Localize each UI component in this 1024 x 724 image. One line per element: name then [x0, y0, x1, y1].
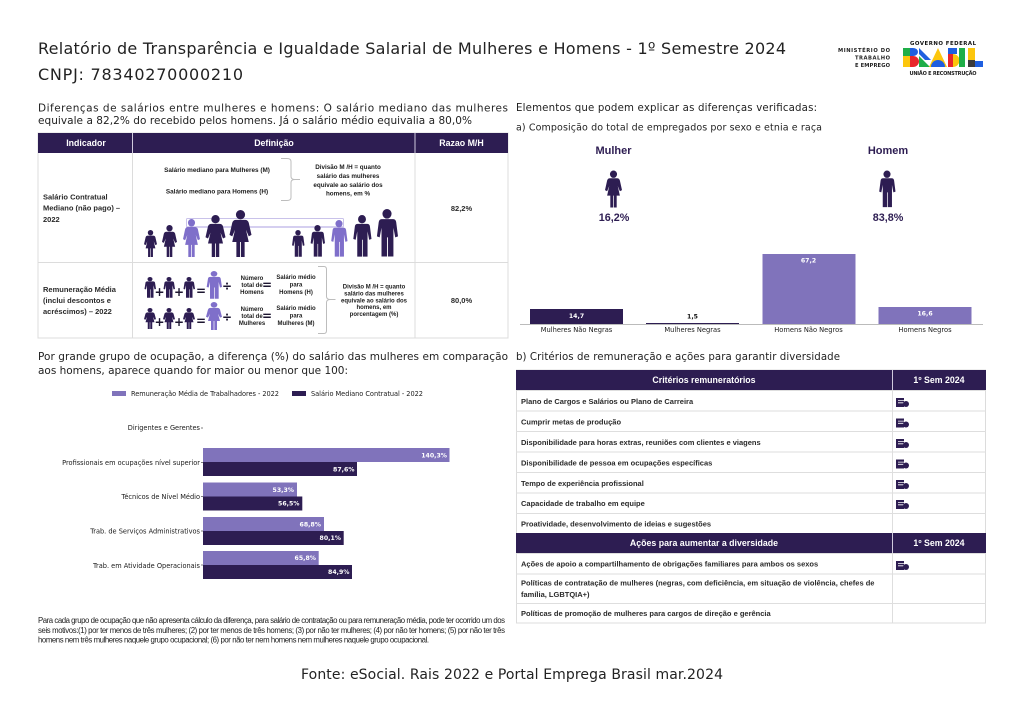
rows: remuneration criteria: Capacidade de trabalho em equipe [521, 499, 645, 508]
rows: diversity actions [521, 560, 874, 618]
header: diversity actions: 1º Sem 2024 [913, 538, 965, 548]
rows: remuneration criteria: Disponibilidade de pessoa em ocupações específicas [521, 458, 712, 468]
table header: Indicador [66, 138, 106, 148]
government logo: UNIÃO E RECONSTRUÇÃO [910, 70, 976, 77]
definition: division explanation: Divisão M /H = quanto [315, 164, 381, 171]
icon: yes marker [896, 561, 909, 570]
rows: remuneration criteria: Tempo de experiência profissional [521, 479, 644, 488]
bar values: 80,1% [320, 535, 341, 542]
stat: men: Homem [868, 145, 908, 157]
heading: explaining elements: Elementos que podem explicar as diferenças verificadas: [516, 103, 817, 114]
bracket [318, 266, 336, 334]
equation: women: Mulheres [239, 321, 266, 327]
heading: criteria: b) Critérios de remuneração e ações para garantir diversidade [516, 351, 840, 363]
intro text: salary differences: equivale a 82,2% do recebido pelos homens. Já o salário médio equivalia a 80,0% [38, 115, 472, 127]
icons: yes markers [896, 398, 909, 509]
title: CNPJ: 78340270000210 [38, 65, 243, 84]
row label: contractual salary [43, 192, 120, 224]
equation: men: = [262, 278, 272, 292]
definition: average division explanation: equivale ao salário dos [341, 298, 408, 304]
rows: diversity actions: Ações de apoio a compartilhamento de obrigações familiares para ambos os sexos [521, 560, 818, 568]
row label: average remuneration: (inclui descontos e [43, 296, 111, 305]
equation: men: + [174, 285, 184, 299]
header: remuneration criteria [516, 370, 986, 390]
rows: remuneration criteria: Cumprir metas de produção [521, 418, 621, 426]
rows: diversity actions: família, LGBTQIA+) [521, 590, 590, 599]
axis labels: Trab. de Serviços Administrativos [89, 528, 201, 536]
row label: contractual salary: 2022 [43, 215, 60, 224]
definition: average division explanation: salário das mulheres [344, 292, 405, 298]
row label: average remuneration: Remuneração Média [43, 285, 117, 294]
equation: women: total de [241, 314, 263, 320]
bars: median salary [203, 462, 357, 579]
median connector [186, 218, 344, 228]
definition: median salary labels: Salário mediano para Homens (H) [166, 188, 268, 196]
equation: men: = [196, 284, 206, 298]
chart legend: Salário Mediano Contratual - 2022 [311, 390, 423, 398]
definition: division explanation [313, 164, 383, 198]
title [38, 39, 786, 84]
intro text: occupation groups: aos homens, aparece quando for maior ou menor que 100: [38, 365, 348, 377]
icons: men by size [292, 209, 398, 257]
equation: women: para [290, 314, 303, 320]
footer source: Fonte: eSocial. Rais 2022 e Portal Emprega Brasil mar.2024 [301, 667, 723, 683]
stat: women [595, 145, 632, 224]
row label: contractual salary: Mediano (não pago) – [43, 204, 120, 212]
ratio: average: 80,0% [451, 296, 472, 305]
definition: median salary labels: Salário mediano para Mulheres (M) [164, 167, 270, 174]
equation: women: Número [241, 307, 264, 313]
definition: average division explanation [341, 284, 408, 318]
bar values: 56,5% [278, 500, 300, 508]
equation: men: Salário médio [276, 275, 316, 281]
bar chart: occupation groups [62, 424, 450, 579]
stat: women: Mulher [595, 145, 632, 157]
government logo: GOVERNO FEDERAL [910, 41, 977, 47]
definition: median salary labels [164, 167, 270, 196]
definition: division explanation: homens, em % [326, 190, 370, 198]
chart legend: Remuneração Média de Trabalhadores - 2022 [131, 390, 279, 398]
header: remuneration criteria: 1º Sem 2024 [913, 375, 965, 385]
bars [520, 254, 983, 324]
footnote [38, 616, 505, 644]
equation: women: = [196, 314, 206, 328]
intro text: salary differences: Diferenças de salários entre mulheres e homens: O salário mediano das mulheres [38, 102, 508, 114]
axis labels: Trab. em Atividade Operacionais [92, 562, 201, 570]
definition: average division explanation: homens, em [356, 305, 392, 311]
intro text: occupation groups [38, 351, 508, 377]
ratio: contractual: 82,2% [451, 204, 472, 213]
bar values: 68,8% [300, 522, 321, 528]
equation: men [144, 271, 316, 299]
header: remuneration criteria: Critérios remuneratórios [652, 375, 756, 385]
rows: remuneration criteria: Proatividade, desenvolvimento de ideias e sugestões [521, 520, 711, 528]
bar values: 87,6% [333, 466, 354, 474]
row label: contractual salary: Salário Contratual [43, 192, 108, 202]
bar labels: Homens Negros [898, 326, 952, 334]
header: diversity actions [516, 533, 986, 553]
bar values: 53,3% [273, 487, 294, 494]
heading: composition: a) Composição do total de empregados por sexo e etnia e raça [516, 122, 822, 134]
equation: women: + [154, 315, 165, 329]
footnote: Para cada grupo de ocupação que não apresenta cálculo da diferença, para salário de contratação ou para remuneração média, pode ter ocorrido um dos [38, 616, 505, 625]
row label: average remuneration: acréscimos) – 2022 [43, 307, 112, 316]
stat: men: 83,8% [873, 212, 904, 224]
equation: women: = [262, 309, 272, 323]
footnote: seis motivos:(1) por ter menos de três mulheres; (2) por ter menos de três homens; (3) por não ter mulheres; (4) por não ter homens; (5) por não ter três [38, 626, 505, 635]
stat: women: 16,2% [599, 212, 630, 224]
ministry label: E EMPREGO [855, 63, 891, 69]
icons: women by size [144, 210, 252, 257]
axis labels: Técnicos de Nível Médio [120, 493, 200, 501]
equation: men: total de [241, 283, 263, 289]
equation: men: Número [241, 276, 264, 282]
government logo [903, 41, 983, 77]
equation: women: ÷ [222, 310, 232, 324]
equation: women: + [174, 315, 184, 329]
bar labels: Mulheres Não Negras [541, 326, 613, 334]
ministry label: TRABALHO [855, 56, 891, 62]
equation: men: Homens [240, 290, 264, 296]
row label: average remuneration [43, 285, 117, 316]
bar labels: Homens Não Negros [774, 326, 843, 334]
panel: criteria table [516, 370, 986, 623]
axis labels: Profissionais em ocupações nível superior [62, 459, 200, 467]
bracket [281, 158, 300, 200]
header: diversity actions: Ações para aumentar a diversidade [630, 538, 778, 548]
equation: women [144, 302, 316, 330]
definition: division explanation: salário das mulheres [317, 173, 380, 180]
bar values: 84,9% [328, 569, 350, 576]
equation: men: ÷ [222, 279, 232, 293]
bar values: 67,2 [801, 258, 816, 264]
footnote: homens nem três mulheres naquele grupo ocupacional; (6) por não ter nem homens nem mulheres naquele grupo ocupacional. [38, 636, 429, 644]
equation: men: para [290, 282, 303, 288]
definition: division explanation: equivale ao salário dos [313, 182, 383, 189]
equation: men: + [154, 285, 165, 299]
rows: remuneration criteria [521, 397, 761, 528]
bar labels [541, 326, 952, 334]
ministry label [838, 46, 891, 69]
definition: average division explanation: Divisão M /H = quanto [343, 284, 406, 290]
stat: men [868, 145, 908, 224]
rows: remuneration criteria: Disponibilidade para horas extras, reuniões com clientes e viagens [521, 438, 761, 447]
bar values: 14,7 [569, 313, 584, 320]
table header: Razao M/H [439, 138, 484, 148]
table header [66, 138, 484, 148]
table header: Definição [254, 138, 294, 148]
bar values: 140,3% [421, 452, 447, 460]
ministry label: MINISTÉRIO DO [838, 46, 891, 54]
bar values: 1,5 [687, 314, 698, 320]
bar values: 16,6 [917, 310, 933, 318]
axis labels [62, 424, 201, 570]
equation: men: Homens (H) [279, 290, 313, 296]
bar values [273, 452, 447, 576]
chart legend [112, 390, 423, 398]
bar values [569, 258, 933, 320]
rows: diversity actions: Políticas de promoção de mulheres para cargos de direção e gerência [521, 609, 772, 618]
rows: remuneration criteria: Plano de Cargos e Salários ou Plano de Carreira [521, 397, 694, 406]
equation: women: Mulheres (M) [277, 321, 315, 327]
panel: indicators table [38, 133, 508, 338]
equation: women: Salário médio [276, 306, 316, 312]
bars: remuneration [203, 448, 450, 565]
bar values: 65,8% [295, 555, 316, 562]
axis labels: Dirigentes e Gerentes [128, 424, 201, 432]
intro text: salary differences [38, 102, 508, 127]
bar labels: Mulheres Negras [664, 326, 721, 334]
title: Relatório de Transparência e Igualdade Salarial de Mulheres e Homens - 1º Semestre 2024 [38, 39, 786, 58]
rows: diversity actions: Políticas de contratação de mulheres (negras, com deficiência, em situação de violência, chefes de [521, 578, 874, 588]
definition: average division explanation: porcentagem (%) [350, 312, 398, 318]
bar chart: composition [520, 254, 983, 334]
intro text: occupation groups: Por grande grupo de ocupação, a diferença (%) do salário das mulheres em comparação [38, 351, 508, 363]
